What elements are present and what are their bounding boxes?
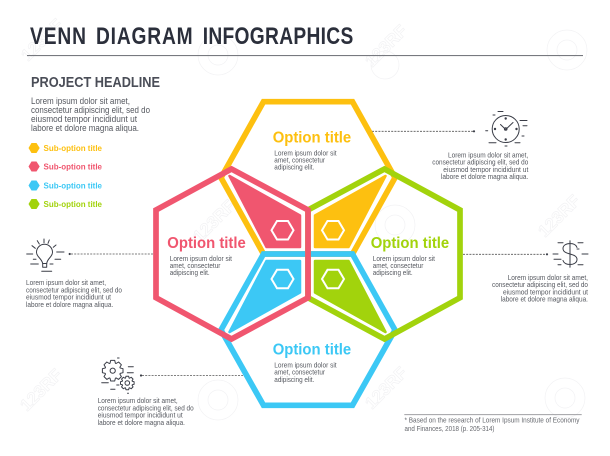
project description: labore et dolore magna aliqua. <box>31 123 139 133</box>
venn diagram <box>156 102 460 405</box>
green hexagon <box>308 169 460 339</box>
project description: Lorem ipsum dolor sit amet, <box>31 96 130 106</box>
option: green: Lorem ipsum dolor sit <box>373 254 435 263</box>
watermarks: 123RF <box>361 21 411 71</box>
footnote <box>404 414 582 433</box>
option: red: Lorem ipsum dolor sit <box>170 254 232 263</box>
legend item: red: Sub-option title <box>44 162 102 172</box>
option: blue: Lorem ipsum dolor sit <box>274 360 337 370</box>
connector: left <box>69 253 155 255</box>
white hexagon: blue petal <box>272 270 294 288</box>
option: green <box>371 235 450 277</box>
text: bottom left: eiusmod tempor incididunt ut <box>98 411 183 420</box>
text: left: labore et dolore magna aliqua. <box>26 300 113 309</box>
option: yellow: Option title <box>273 130 352 146</box>
footnote: and Finances, 2018 (p. 205-314) <box>404 424 494 433</box>
text: bottom left: Lorem ipsum dolor sit amet, <box>98 396 178 405</box>
petal: green <box>315 261 386 332</box>
text: top right: labore et dolore magna aliqua. <box>441 172 528 181</box>
connector: bottom left <box>140 374 243 377</box>
project headline: PROJECT HEADLINE <box>31 75 160 91</box>
option: yellow: Lorem ipsum dolor sit <box>274 148 337 157</box>
project description <box>31 96 150 133</box>
title: INFOGRAPHICS <box>203 22 353 50</box>
text: right <box>492 273 588 304</box>
text: left <box>26 278 122 309</box>
option: green: amet, consectetur <box>373 261 424 270</box>
petal: red <box>230 176 300 247</box>
text: bottom left: labore et dolore magna aliqua. <box>98 418 185 427</box>
option: yellow: adipiscing elit. <box>274 163 314 172</box>
option: red: adipiscing elit. <box>170 268 210 277</box>
project description: eiusmod tempor incididunt ut <box>31 114 137 124</box>
petal: blue <box>230 261 300 332</box>
title: DIAGRAM <box>96 22 193 50</box>
text: top right <box>432 150 528 181</box>
legend <box>28 143 102 209</box>
yellow hexagon <box>221 102 395 254</box>
text: top right: eiusmod tempor incididunt ut <box>443 165 528 174</box>
text: right: Lorem ipsum dolor sit amet, <box>508 273 588 282</box>
text: left: Lorem ipsum dolor sit amet, <box>26 278 106 287</box>
option: red: Option title <box>167 235 246 252</box>
option: blue: amet, consectetur <box>274 368 326 377</box>
footnote: * Based on the research of Lorem Ipsum Institute of Economy <box>404 416 580 425</box>
legend item: green: Sub-option title <box>44 199 102 209</box>
white hexagon: yellow petal <box>322 221 344 240</box>
blue hexagon <box>221 254 395 405</box>
option: red <box>167 235 246 277</box>
option: yellow <box>273 130 352 172</box>
connector: top right <box>372 130 475 132</box>
white hexagon: green petal <box>322 270 344 288</box>
icon: clock <box>486 112 527 146</box>
text: right: eiusmod tempor incididunt ut <box>503 287 588 296</box>
watermarks: 123RF <box>189 196 239 246</box>
white hexagon: red petal <box>272 221 294 240</box>
watermarks: 123RF <box>534 191 584 241</box>
legend item: blue: Sub-option title <box>44 180 102 190</box>
watermarks: 123RF <box>361 363 411 413</box>
petal: yellow <box>315 176 386 247</box>
icon: light bulb <box>27 239 64 271</box>
watermarks: 123RF <box>17 15 67 65</box>
icon: dollar <box>553 241 588 267</box>
text: left: consectetur adipiscing elit, sed do <box>26 285 122 294</box>
text: right: labore et dolore magna aliqua. <box>501 295 588 304</box>
text: top right: Lorem ipsum dolor sit amet, <box>448 150 528 159</box>
icon: gears <box>102 358 134 393</box>
watermarks: 123RF <box>16 365 66 415</box>
option: yellow: amet, consectetur <box>274 156 326 164</box>
option: blue: adipiscing elit. <box>274 375 314 384</box>
title: VENN <box>30 22 86 50</box>
option: red: amet, consectetur <box>170 261 221 270</box>
title <box>30 22 353 50</box>
project description: consectetur adipiscing elit, sed do <box>31 105 150 115</box>
option: blue: Option title <box>273 342 352 359</box>
red hexagon <box>156 169 308 339</box>
option: green: adipiscing elit. <box>373 268 413 277</box>
legend item: yellow: Sub-option title <box>44 143 102 153</box>
text: top right: consectetur adipiscing elit, sed do <box>432 158 528 166</box>
option: blue <box>273 342 352 384</box>
text: bottom left: consectetur adipiscing elit, sed do <box>98 403 194 412</box>
connector: right <box>463 253 548 255</box>
title rule <box>27 55 583 56</box>
option: green: Option title <box>371 235 450 252</box>
text: left: eiusmod tempor incididunt ut <box>26 293 111 302</box>
text: bottom left <box>98 396 194 427</box>
text: right: consectetur adipiscing elit, sed do <box>492 280 588 289</box>
